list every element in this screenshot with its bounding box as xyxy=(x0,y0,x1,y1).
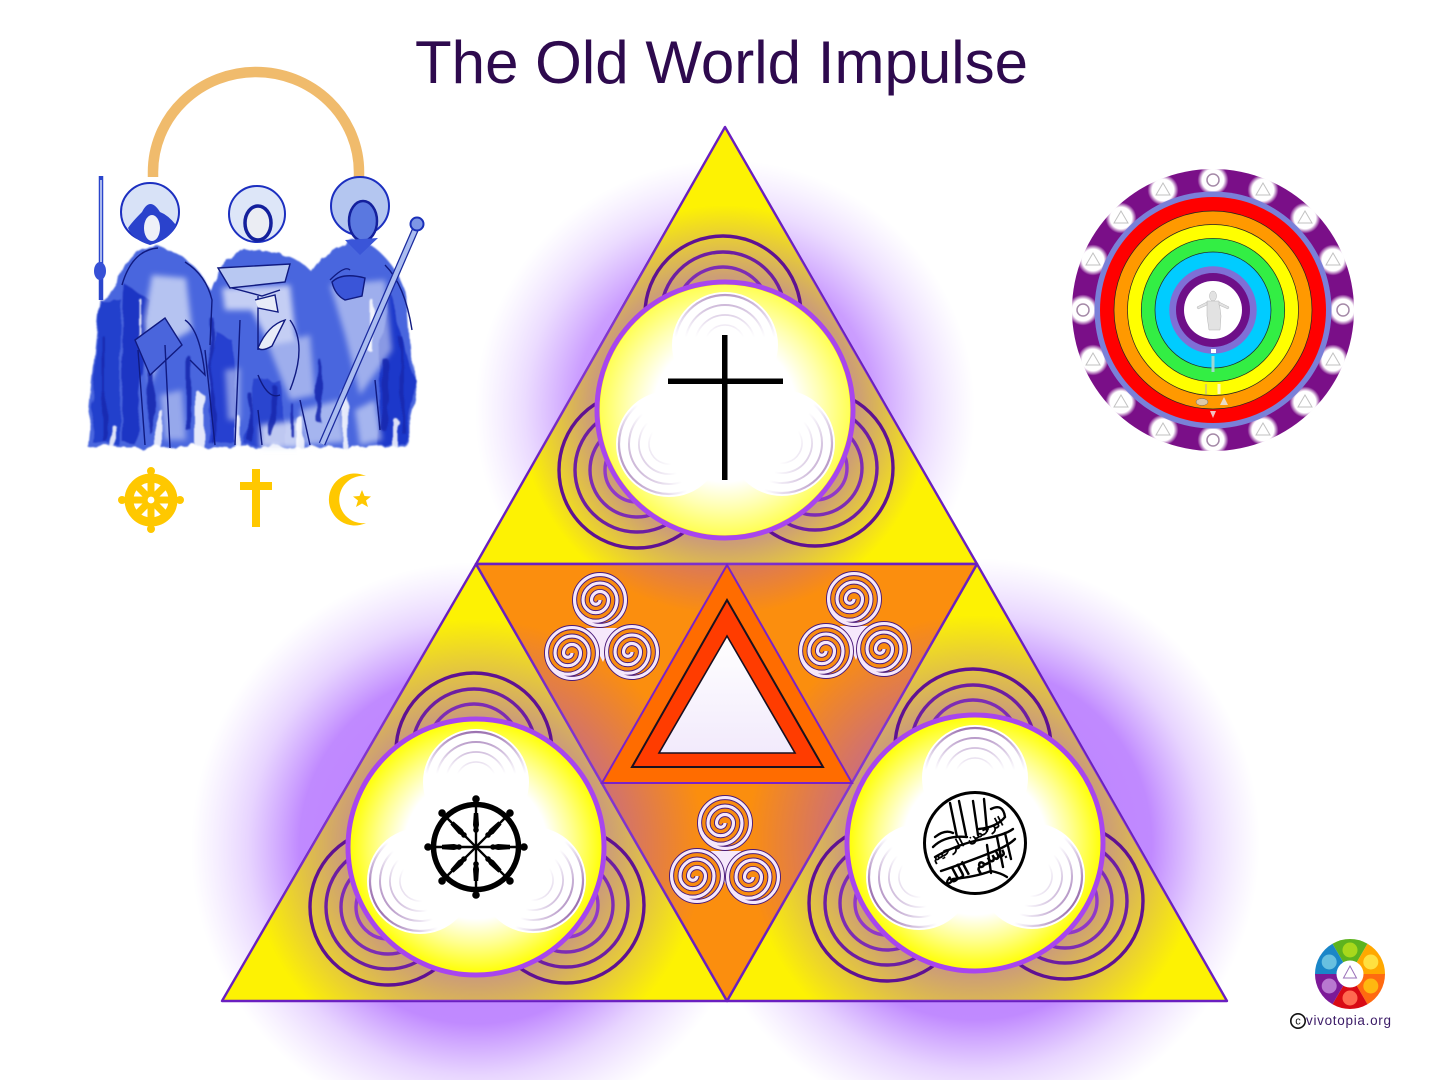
ring badges xyxy=(1068,164,1358,456)
central nested triangle xyxy=(602,565,852,783)
right saint staff xyxy=(322,218,424,444)
ink outlines xyxy=(122,248,412,448)
vivotopia logo xyxy=(1315,939,1385,1009)
icon: bismillah calligraphy roundel: بسم الله xyxy=(939,839,1010,890)
watercolor streaks xyxy=(105,300,402,452)
right saint halo and head xyxy=(331,177,389,255)
purple outer ring xyxy=(1072,169,1354,451)
icon: dharma wheel xyxy=(424,795,528,899)
golden arch xyxy=(153,72,359,177)
large triangle made of four triangles xyxy=(222,127,1227,1001)
lower left yellow triangle xyxy=(222,564,727,1001)
title: The Old World Impulse xyxy=(415,29,1028,96)
christ figure sketch xyxy=(1197,291,1229,330)
icon: bismillah calligraphy roundel xyxy=(924,792,1026,894)
icon: gold cross xyxy=(240,469,272,527)
middle saint halo and head xyxy=(229,186,285,242)
colour wheel xyxy=(1315,939,1385,1009)
sphere: Christianity xyxy=(559,236,893,548)
top yellow triangle xyxy=(476,127,977,564)
lower right yellow triangle xyxy=(727,564,1227,1001)
icon: latin cross xyxy=(668,335,783,480)
purple glow behind triangle xyxy=(191,155,1260,1080)
gold symbols row xyxy=(118,467,371,533)
triple spiral: bottom xyxy=(672,798,778,902)
copyright credit: vivotopia.org xyxy=(1306,1013,1391,1028)
rainbow rings xyxy=(1094,192,1332,428)
left saint halo and head xyxy=(121,183,179,245)
robes highlights xyxy=(144,275,392,448)
icon: gold crescent and star xyxy=(329,473,371,526)
icon: bismillah calligraphy roundel: الرحمن الرحيم xyxy=(929,815,1006,865)
copyright credit: c xyxy=(1295,1016,1301,1028)
icon: gold dharma wheel xyxy=(118,467,184,533)
triple spiral: upper right xyxy=(801,574,909,676)
left saint staff xyxy=(99,176,103,300)
sphere: Islam xyxy=(809,669,1143,981)
left saint hand on staff xyxy=(94,262,106,280)
illustration: three saints under a golden arch xyxy=(86,72,424,452)
robes wash xyxy=(86,240,416,448)
pale wash over top sphere xyxy=(600,285,850,535)
small kingdom icons xyxy=(1196,349,1228,418)
mauve tint on triangle surfaces xyxy=(268,210,1181,1001)
central inverted orange triangle xyxy=(476,564,977,1001)
rainbow mandala xyxy=(1068,164,1358,456)
sphere: Buddhism xyxy=(310,673,644,985)
triple spiral: upper left xyxy=(547,575,657,678)
